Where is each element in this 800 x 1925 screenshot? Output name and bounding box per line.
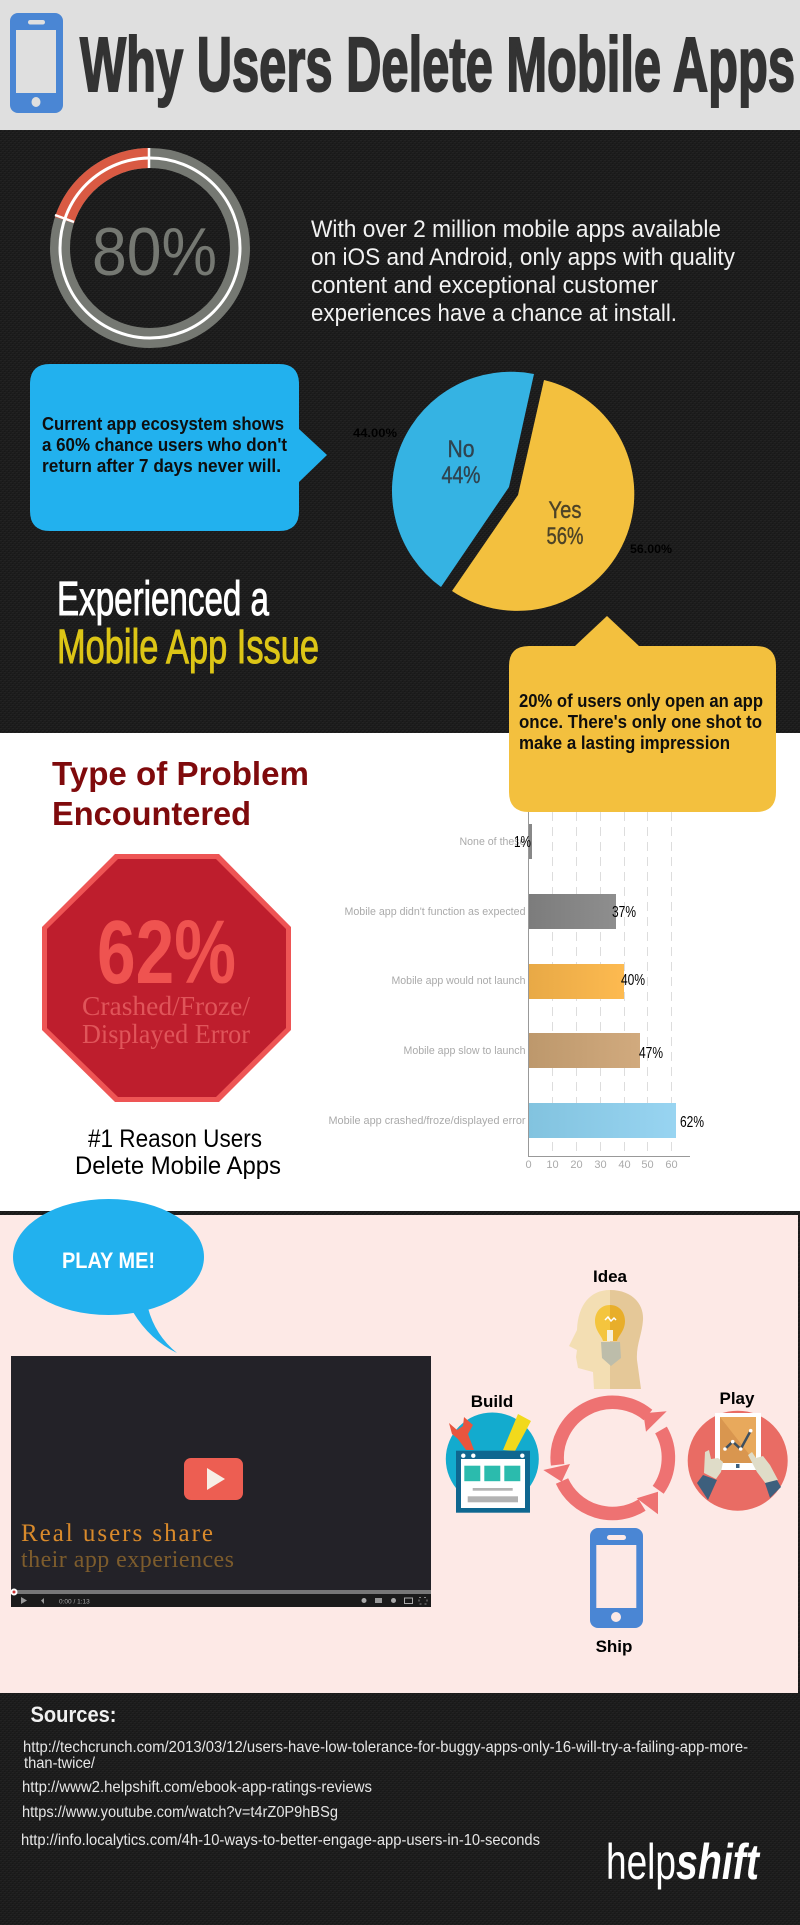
bar: crashed froze 62%: Mobile app crashed/froze/displayed error bbox=[328, 1115, 526, 1127]
bar: none of these 1%: 1% bbox=[514, 834, 531, 851]
chart axis labels: 30 bbox=[594, 1159, 607, 1171]
icon: stop sign 62%: Crashed/Froze/ bbox=[82, 991, 251, 1021]
video caption: their app experiences bbox=[21, 1547, 234, 1573]
icon: hands holding tablet bbox=[688, 1411, 788, 1511]
logo: helpshift: shift bbox=[676, 1834, 761, 1890]
icon: blue phone in header bbox=[10, 13, 63, 113]
text block: source links: http://www2.helpshift.com/ebook-app-ratings-reviews bbox=[22, 1779, 372, 1796]
pie value: 44.00%: 44.00% bbox=[353, 426, 397, 440]
chart: 80% donut ring bbox=[55, 148, 240, 338]
pie value: 56.00%: 56.00% bbox=[630, 542, 672, 556]
heading: experienced a mobile app issue: Mobile App Issue bbox=[57, 621, 319, 674]
icon: head with light bulb bbox=[569, 1290, 643, 1389]
bar: would not launch 40%: Mobile app would not launch bbox=[392, 975, 526, 987]
logo: helpshift: help bbox=[606, 1834, 676, 1890]
video caption: Real users share bbox=[21, 1520, 213, 1547]
text block: source links: http://techcrunch.com/2013/03/12/users-have-low-tolerance-for-buggy-apps-only-16-will-try-a-failing-app-more- bbox=[23, 1739, 748, 1756]
logo: helpshift bbox=[606, 1834, 761, 1890]
chart axis labels: 10 bbox=[546, 1159, 559, 1171]
icon: stop sign 62% bbox=[42, 854, 291, 1102]
icon: stop sign 62%: Displayed Error bbox=[82, 1019, 250, 1049]
heading: type of problem encountered: Type of Problem bbox=[52, 755, 309, 792]
icon: play button bbox=[184, 1458, 243, 1500]
pie label: Yes: 56% bbox=[546, 523, 584, 550]
video controls: 0:00 / 1:13 bbox=[59, 1598, 90, 1606]
chart: 80% donut ring: 80% bbox=[92, 214, 217, 290]
text block: source links: than-twice/ bbox=[24, 1755, 96, 1772]
text block: intro paragraph bbox=[311, 216, 735, 327]
heading: experienced a mobile app issue: Experienced a bbox=[57, 573, 269, 626]
text block: intro paragraph: content and exceptional customer bbox=[311, 272, 658, 299]
bar: would not launch 40%: 40% bbox=[621, 972, 645, 989]
heading: sources: Sources: bbox=[30, 1702, 116, 1727]
heading: type of problem encountered: Encountered bbox=[52, 795, 251, 832]
callout: blue 60% chance: a 60% chance users who don't bbox=[42, 435, 287, 455]
callout: yellow 20% of users: once. There's only one shot to bbox=[519, 712, 762, 732]
bar: slow to launch 47%: 47% bbox=[639, 1045, 663, 1062]
chart axis labels: 0 bbox=[525, 1159, 532, 1171]
bar: crashed froze 62% bbox=[328, 1103, 704, 1138]
callout: play me speech bubble bbox=[13, 1199, 204, 1353]
bar: did not function 37%: 37% bbox=[612, 904, 636, 921]
panel: white problem section bbox=[0, 733, 800, 1211]
panel: header band bbox=[0, 0, 800, 130]
panel: pink video section bbox=[0, 1215, 798, 1693]
chart axis labels bbox=[525, 1159, 678, 1171]
video controls bbox=[10, 1588, 431, 1607]
callout: play me speech bubble: PLAY ME! bbox=[62, 1248, 155, 1273]
chart axis labels: 40 bbox=[618, 1159, 631, 1171]
text block: intro paragraph: With over 2 million mobile apps available bbox=[311, 216, 721, 243]
icon: ship phone bbox=[590, 1528, 643, 1628]
text block: number one reason bbox=[75, 1125, 281, 1180]
pie slice: No 44% bbox=[392, 372, 534, 587]
label: Play: Play bbox=[720, 1389, 755, 1408]
label: Idea: Idea bbox=[593, 1267, 628, 1286]
chart: pie experienced issue bbox=[353, 372, 672, 611]
text block: source links bbox=[21, 1739, 748, 1849]
pie label: Yes bbox=[546, 497, 584, 550]
panel: dark intro section bbox=[0, 130, 800, 733]
bar: crashed froze 62%: 62% bbox=[680, 1114, 704, 1131]
text block: number one reason: #1 Reason Users bbox=[88, 1125, 262, 1153]
callout: blue 60% chance bbox=[30, 364, 327, 531]
chart: horizontal bars of problem types bbox=[328, 812, 704, 1171]
video caption bbox=[21, 1520, 234, 1573]
video player bbox=[10, 1356, 431, 1607]
bar: did not function 37%: Mobile app didn't function as expected bbox=[344, 906, 526, 918]
callout: blue 60% chance: return after 7 days never will. bbox=[42, 456, 281, 476]
chart axis labels: 50 bbox=[641, 1159, 654, 1171]
label: Ship: Ship bbox=[596, 1637, 632, 1656]
text block: source links: https://www.youtube.com/watch?v=t4rZ0P9hBSg bbox=[22, 1804, 338, 1821]
bar: would not launch 40% bbox=[392, 964, 645, 999]
callout: yellow 20% of users bbox=[509, 616, 776, 812]
pie label: No: 44% bbox=[442, 462, 480, 489]
pie label: No bbox=[442, 436, 480, 489]
bar: slow to launch 47%: Mobile app slow to launch bbox=[404, 1045, 526, 1057]
label: Build: Build bbox=[471, 1392, 513, 1411]
text block: intro paragraph: experiences have a chance at install. bbox=[311, 300, 677, 327]
text block: number one reason: Delete Mobile Apps bbox=[75, 1152, 281, 1180]
bar: none of these 1%: None of these bbox=[460, 836, 526, 848]
callout: yellow 20% of users: make a lasting impression bbox=[519, 733, 730, 753]
panel: dark footer and borders bbox=[0, 1211, 800, 1925]
heading: type of problem encountered bbox=[52, 755, 309, 832]
pie slice: Yes 56% bbox=[452, 380, 634, 611]
diagram: idea build ship play cycle bbox=[446, 1267, 788, 1656]
callout: blue 60% chance: Current app ecosystem shows bbox=[42, 414, 284, 434]
pie label: Yes: Yes bbox=[548, 497, 582, 524]
callout: yellow 20% of users: 20% of users only open an app bbox=[519, 691, 763, 711]
icon: stop sign 62%: 62% bbox=[97, 903, 236, 1003]
text block: source links: http://info.localytics.com/4h-10-ways-to-better-engage-app-users-in-10-seconds bbox=[21, 1832, 540, 1849]
bar: slow to launch 47% bbox=[404, 1033, 663, 1068]
pie label: No: No bbox=[448, 436, 474, 463]
icon: build toolbox bbox=[446, 1412, 539, 1513]
text block: intro paragraph: on iOS and Android, only apps with quality bbox=[311, 244, 735, 271]
heading: experienced a mobile app issue bbox=[57, 573, 319, 674]
bar: did not function 37% bbox=[344, 894, 636, 929]
chart axis labels: 60 bbox=[665, 1159, 678, 1171]
chart axis labels: 20 bbox=[570, 1159, 583, 1171]
arrows: cycle bbox=[543, 1402, 668, 1514]
bar: none of these 1% bbox=[460, 824, 532, 859]
